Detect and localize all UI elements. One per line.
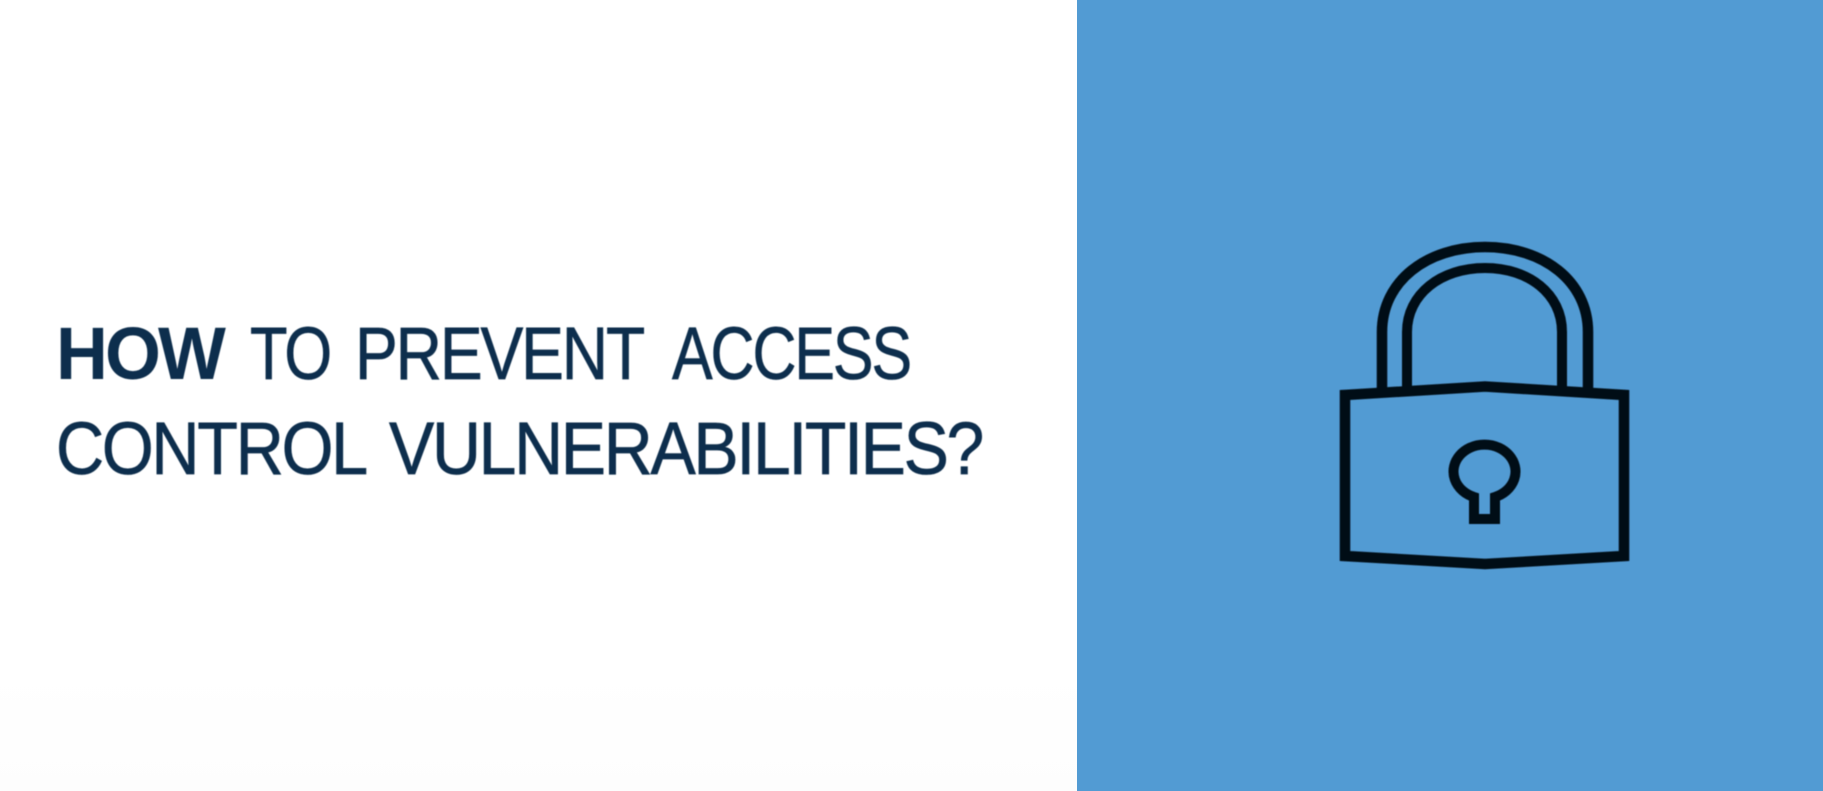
title line 1: PREVENT [355,312,644,395]
padlock keyhole [1454,445,1515,519]
padlock outer shackle [1382,247,1588,390]
icon: padlock [1345,247,1624,564]
title line 1: ACCESS [672,312,910,395]
panel: white background [0,0,1077,791]
title line 1: HOW [56,312,226,395]
title line 1 [56,312,910,395]
title [56,312,982,490]
panel: blue background [1077,0,1823,791]
title line 1: TO [250,312,330,395]
padlock inner shackle [1407,268,1562,390]
title line 2 [56,407,982,490]
padlock body [1345,386,1624,564]
title line 2: VULNERABILITIES? [389,407,982,490]
title line 2: CONTROL [56,407,366,490]
